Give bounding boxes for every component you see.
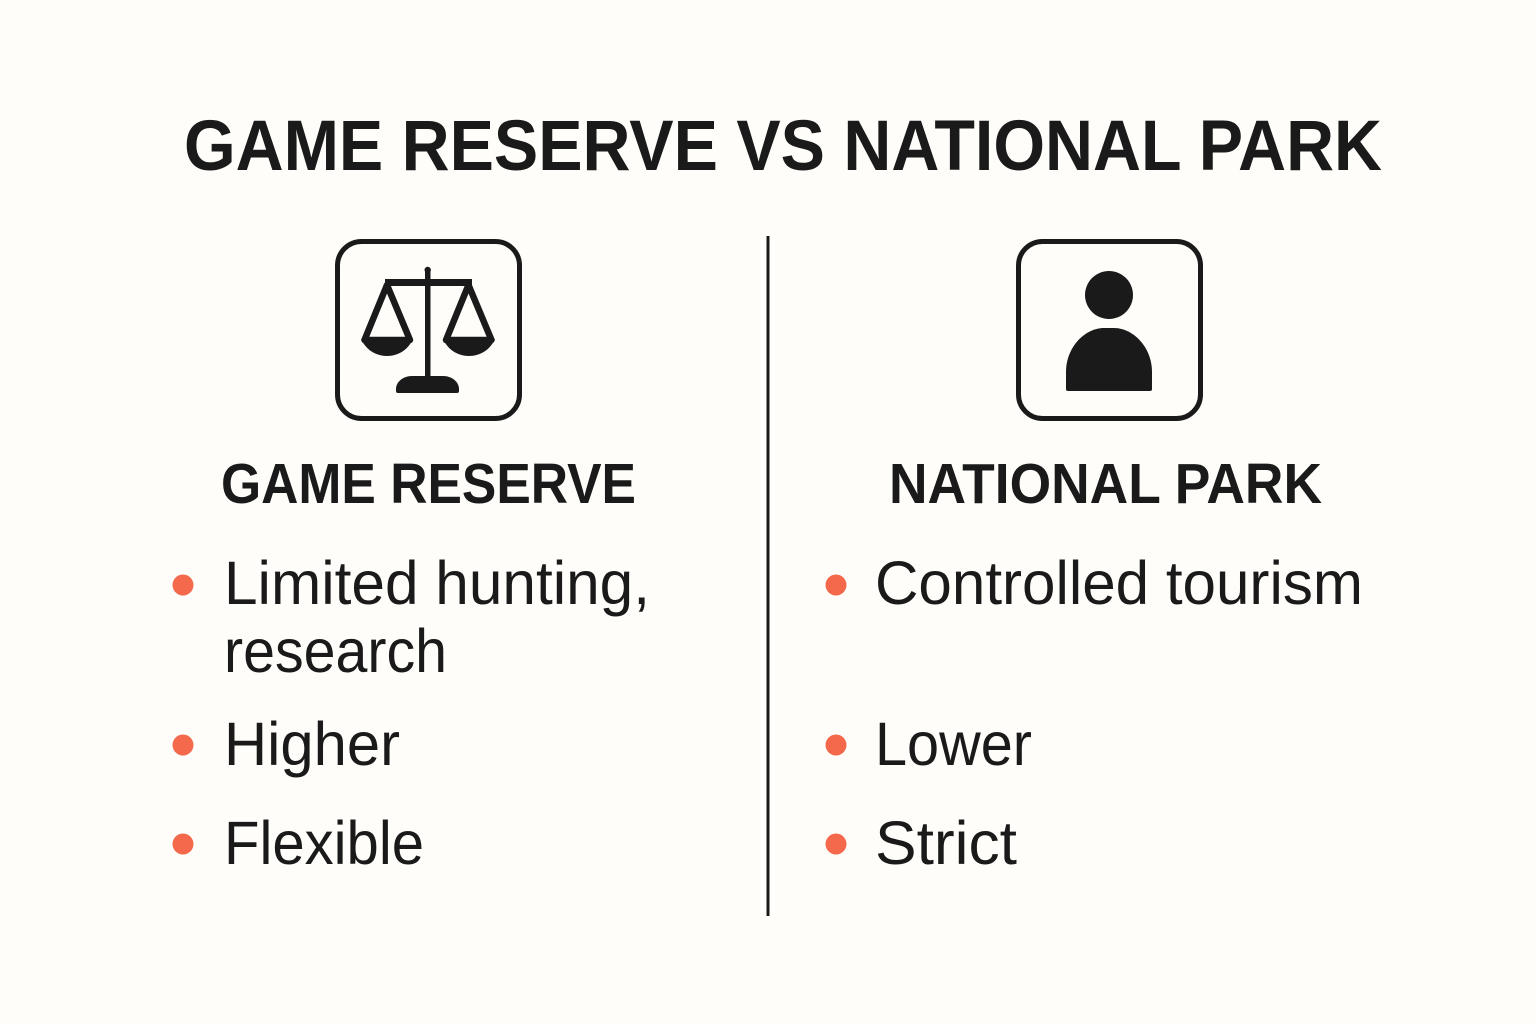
bullet: limited hunting, research: research <box>224 617 447 685</box>
bullet: controlled tourism: Controlled tourism <box>875 549 1363 617</box>
panel: national park <box>826 242 1363 877</box>
bullet: strict: Strict <box>875 809 1017 877</box>
bullet: lower: Lower <box>875 710 1032 778</box>
title: GAME RESERVE VS NATIONAL PARK <box>184 107 1382 186</box>
icon: balance scales <box>338 242 520 418</box>
bullet: higher: Higher <box>224 710 400 778</box>
heading: national park: NATIONAL PARK <box>889 452 1322 516</box>
icon: person <box>1018 242 1200 418</box>
bullet: limited hunting, research <box>172 549 650 685</box>
bullet: limited hunting, research: Limited hunting, <box>224 549 650 617</box>
panel: game reserve <box>172 242 650 877</box>
bullet: flexible: Flexible <box>224 809 424 877</box>
heading: game reserve: GAME RESERVE <box>221 452 636 516</box>
center divider <box>766 236 770 916</box>
